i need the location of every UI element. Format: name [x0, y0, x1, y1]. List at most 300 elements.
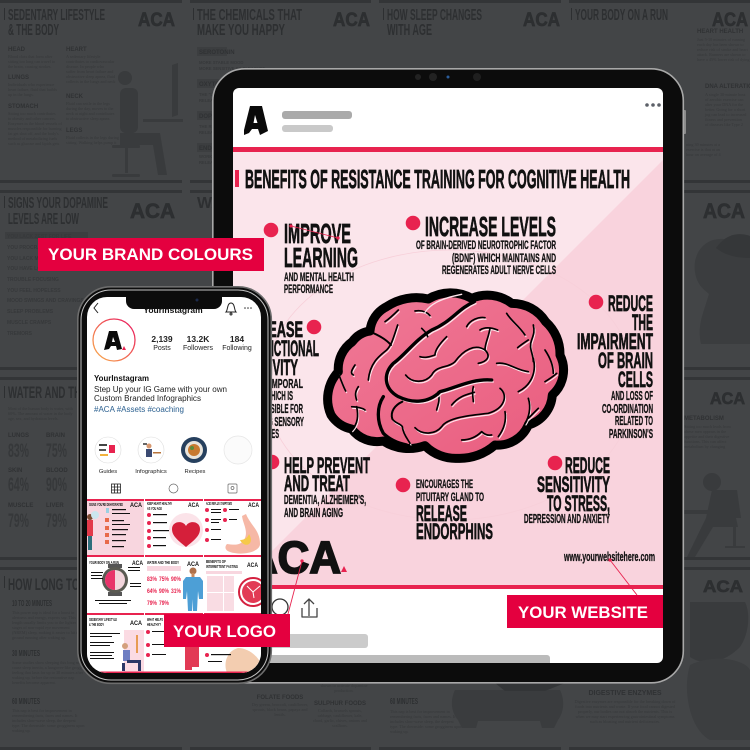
phone notch	[126, 296, 222, 309]
background tile: sedentary lifestyle: contributes to cardiovascular	[66, 59, 115, 64]
background tile: your body on a run: A single 30-minute bout	[705, 92, 746, 97]
background tile: sedentary lifestyle: A sedentary lifestyle	[66, 54, 101, 59]
phone mockup	[78, 287, 271, 683]
background tile: folate and sulphur foods	[252, 683, 368, 728]
benefit: release endorphins: RELEASE	[416, 501, 467, 526]
benefit: reduce sensitivity to stress: SENSITIVITY	[537, 472, 610, 497]
background tile: sedentary lifestyle: fat get shut off, and the body's	[8, 131, 59, 137]
background tile: digestive enzymes: when we may start experiencing gastrointestinal symptoms	[575, 714, 675, 719]
background tile: metabolism with person at desk: Sitting too much leads from	[684, 424, 731, 429]
background tile: sedentary lifestyle: Sitting too much contributes	[8, 111, 56, 116]
background tile: your body on a run: each day has been shown to	[697, 42, 744, 47]
background tile: water and the body: Most of the human body is water, with	[8, 406, 74, 412]
benefit: increase levels	[406, 216, 556, 274]
profile stats	[152, 336, 252, 352]
thumbnail: water and the body: 75%	[159, 577, 170, 583]
profile bio	[94, 374, 227, 414]
background tile: sedentary lifestyle	[4, 7, 175, 146]
post header username placeholders	[282, 111, 352, 132]
infographic post panel: TO STRESS,	[547, 491, 610, 516]
infographic post panel: AND LOSS OF	[611, 389, 653, 403]
thumbnail: heart health: KEEP HEART HEALTHY	[147, 501, 172, 506]
background tile: 60 minutes with couch: 60 MINUTES	[390, 697, 418, 706]
benefit: help prevent and treat: HELP PREVENT	[284, 453, 370, 478]
background tile: your body on a run	[571, 7, 750, 157]
background tile: folate and sulphur foods: lentils.	[274, 712, 286, 717]
background tile: the chemicals that make you happy: RELEASED BY EXERCISE	[199, 160, 251, 165]
infographic post panel: RELATED TO	[615, 414, 653, 428]
background tile: sedentary lifestyle: muscles responsible for burning	[8, 126, 63, 131]
post logo: ACA	[272, 540, 347, 574]
background illustration: liver and intestines: ACA	[703, 577, 743, 596]
background tile: water and the body: 79%	[8, 511, 29, 532]
background tile: how long to nap: 30 MINUTES	[12, 649, 40, 658]
notification bell icon	[226, 303, 236, 315]
background tile: how long to nap: alertness and energy, experts say. This	[12, 615, 76, 621]
background tile: sedentary lifestyle: Fluid collects in the legs during	[66, 135, 120, 140]
infographic post panel	[232, 147, 663, 589]
background illustration: woman hugging herself: ACA	[703, 200, 745, 223]
thumbnail: sedentary lifestyle: SEDENTARY LIFESTYLE	[89, 617, 117, 622]
background tile: metabolism with person at desk	[684, 389, 745, 557]
background tile: sedentary lifestyle: SEDENTARY LIFESTYLE	[8, 7, 105, 24]
thumbnail: sedentary lifestyle	[87, 613, 144, 673]
faint connecting circle	[272, 250, 552, 488]
background tile: how long to nap: remembering facts, faces and names. It	[12, 713, 78, 719]
callout connector: website	[609, 559, 637, 595]
benefit: release endorphins	[396, 477, 493, 544]
background tile: your body on a run: attack. Runners are shown to	[697, 52, 746, 57]
background tile: sedentary lifestyle: sitting. Walking helps pump it	[66, 140, 117, 145]
background tile: signs your dopamine levels are low: YOU PROCRASTINATE	[7, 245, 63, 251]
benefit: help prevent and treat: AND BRAIN AGING	[284, 506, 343, 520]
story highlight: infographics: Infographics	[135, 469, 167, 475]
callout connector: brand colours	[290, 225, 339, 239]
background tile: water and the body: LIVER	[46, 503, 64, 509]
background tile: metabolism with person at desk: obese men appears in the	[684, 429, 726, 434]
background tile: sedentary lifestyle: Fluid can settle in the legs	[66, 101, 110, 106]
benefit: improve learning: AND MENTAL HEALTH	[284, 270, 354, 284]
background tile: your body on a run: of diseases like Type 2	[705, 122, 743, 127]
background tile: sedentary lifestyle: collects in the lungs and neck	[66, 79, 116, 84]
benefit: reduce impairment	[577, 291, 653, 441]
tablet mockup	[213, 69, 686, 683]
background tile: sedentary lifestyle: the brain, causing strokes.	[8, 64, 52, 70]
background tile: the chemicals that make you happy: THE REWARD CHEMICAL	[199, 124, 251, 129]
background tile: sedentary lifestyle: during the day, moves to the	[66, 106, 114, 112]
background tile: how long to nap: This power nap is ideal for a boost in	[12, 610, 75, 615]
benefit: release endorphins: ENDORPHINS	[416, 519, 493, 544]
background tile: sedentary lifestyle: ACA	[138, 10, 175, 31]
background tile: signs your dopamine levels are low: MOOD SWINGS AND CRAVINGS	[7, 298, 84, 304]
benefit: reduce impairment: CO-ORDINATION	[602, 402, 653, 416]
thumbnail: heart health: ACA	[188, 502, 199, 509]
infographic post panel: CELLS	[618, 367, 653, 392]
background tile: 60 minutes with couch: type. The downside: some grogginess upon	[390, 724, 463, 729]
background tile: how long to nap: 60 MINUTES	[12, 697, 40, 706]
benefit: improve learning	[264, 218, 358, 296]
background tile: your body on a run: HEART HEALTH	[697, 29, 743, 35]
profile bio: #ACA #Assets #coaching	[94, 405, 184, 414]
back arrow	[94, 303, 98, 313]
label: your brand colours	[38, 238, 264, 271]
thumbnail: heart health: AS YOU AGE	[147, 506, 162, 511]
thumbnail: water and the body: 79%	[147, 601, 158, 607]
tablet screen	[232, 88, 663, 667]
profile bio: YourInstagram	[94, 374, 149, 383]
benefit: increase levels: (BDNF) WHICH MAINTAINS AND	[452, 251, 556, 265]
label: your website: YOUR WEBSITE	[518, 604, 648, 622]
clock tab icon	[169, 484, 178, 493]
background illustration: seated person at desk	[112, 63, 183, 177]
thumbnail: water and the body: 64%	[147, 589, 158, 595]
background tile: how long to nap: includes slow-wave sleep, the deepest	[12, 718, 76, 724]
thumbnail: hydration: SIGNS YOU'RE DEHYDRATED	[89, 502, 123, 507]
thumbnail: your body on a run: ACA	[132, 560, 143, 567]
background tile: the chemicals that make you happy: RELEASED BY GOALS	[199, 130, 245, 135]
background tile: how sleep changes with age: WITH AGE	[387, 22, 432, 39]
tablet side button	[683, 110, 686, 134]
benefit: help prevent and treat: AND TREAT	[284, 471, 350, 496]
benefit: increase levels: INCREASE LEVELS	[425, 211, 556, 242]
background tile: signs your dopamine levels are low: SLEEP PROBLEMS	[7, 309, 54, 315]
background tile: water and the body: SKIN	[8, 468, 22, 474]
background tile: your body on a run: better. Going for a short	[705, 107, 746, 112]
background tile: the chemicals that make you happy: ACA	[333, 10, 370, 31]
tablet body	[213, 69, 683, 683]
post header menu dots	[645, 103, 661, 107]
background tile: your body on a run: jog can lead to increased	[704, 112, 747, 117]
background tile: folate and sulphur foods: shown to activate dopamine	[321, 683, 368, 688]
profile stats: 2,139	[151, 334, 173, 344]
background tile: signs your dopamine levels are low: YOU HAVE LOW ENERGY	[7, 266, 69, 272]
brain illustration	[328, 293, 564, 458]
background tile: digestive enzymes: foods into nutrients and waste. If your food cannot digested	[575, 704, 676, 709]
background tile: water and the body: 75%	[46, 441, 67, 462]
background tile: folate and sulphur foods: cabbage, cauliflower, kale,	[318, 713, 362, 719]
background tile: how sleep changes with age: HOW SLEEP CHANGES	[387, 7, 482, 24]
thumbnail: acid reflux: ACID REFLUX SYMPTOMS	[206, 501, 232, 506]
background tile: sedentary lifestyle: LEGS	[66, 128, 82, 134]
profile bio: Custom Branded Infographics	[94, 394, 201, 403]
story highlight: guides: Guides	[99, 469, 117, 475]
background tile: water and the body: 90%	[46, 475, 67, 496]
benefit: help prevent and treat: DEMENTIA, ALZHEIMER'S,	[284, 493, 366, 507]
brain fold highlights	[339, 312, 558, 445]
background tile: sedentary lifestyle: obstructive sleep apnea, fluid	[66, 74, 116, 80]
background tile: how sleep changes with age: ACA	[523, 10, 560, 31]
background tile: signs your dopamine levels are low: TROUBLE FOCUSING	[7, 277, 59, 283]
comment icon	[272, 599, 288, 615]
phone screen	[87, 297, 267, 673]
profile username header: YourInstagram	[143, 305, 203, 315]
background illustration: liver and intestines	[687, 577, 750, 740]
thumbnail: water and the body: 90%	[159, 589, 170, 595]
thumbnail: water and the body: 90%	[171, 577, 182, 583]
story highlight: recipes	[181, 437, 207, 475]
thumbnail: water and the body: 31%	[171, 589, 182, 595]
background tile: digestive enzymes: Digestive enzymes are responsible for the breaking down of	[575, 699, 676, 704]
background tile: folate and sulphur foods: Dry greens, broccoli, cauliflower,	[252, 702, 308, 708]
background tile: how long to nap: 10 TO 20 MINUTES	[12, 599, 52, 608]
background tile: digestive enzymes	[575, 690, 676, 724]
background tile: your body on a run: ning 30 minutes at a	[686, 142, 720, 147]
thumbnail: sedentary lifestyle: ACA	[130, 620, 142, 627]
background tile: how long to nap: ground running after waking up.	[12, 635, 66, 640]
grid tab icon	[112, 484, 120, 493]
thumbnail: intermittent fasting: BENEFITS OF	[206, 559, 226, 564]
background tile: water and the body: 64%	[8, 475, 29, 496]
background tile: water and the body: 79%	[46, 511, 67, 532]
background tile: signs your dopamine levels are low: YOU FEEL HOPELESS	[7, 288, 61, 294]
benefit: reduce impairment: PARKINSON'S	[609, 427, 653, 441]
background tile: sedentary lifestyle: Blood clots that form after	[8, 54, 53, 59]
story highlight: recipes: Recipes	[185, 469, 206, 475]
benefit: increase functional activity: MODALITIES	[244, 427, 279, 441]
benefit: increase functional activity: ACTIVITY	[246, 355, 298, 380]
background tile: your body on a run: YOUR BODY ON A RUN	[575, 7, 668, 24]
background tile: your body on a run: exercise is that at an	[686, 147, 721, 152]
benefit: increase functional activity: RESPONSIBLE FOR	[245, 402, 303, 416]
infographic post panel: REDUCE	[608, 291, 653, 316]
post logo: ACA: ACA	[246, 532, 341, 583]
benefit: release endorphins: PITUITARY GLAND TO	[416, 490, 484, 504]
background tile: your body on a run: alter your DNA for the	[705, 102, 743, 107]
background tile: metabolism with person at desk: metabolism by changing	[684, 444, 726, 449]
background tile: how long to nap: waking up, before the restorative nap	[12, 675, 74, 681]
background tile: the chemicals that make you happy: THE CHEMICALS THAT	[197, 7, 302, 24]
background tile: how long to nap: benefits become apparent.	[12, 680, 56, 685]
background tile: how long to nap	[4, 575, 103, 733]
background tile: sedentary lifestyle: such as glucose and lipids gets	[8, 141, 60, 146]
background tile: the chemicals that make you happy: OXYTOCIN	[199, 82, 230, 88]
profile stats: Following	[222, 345, 252, 352]
background tile: how long to nap: This nap is best for improvement in	[12, 708, 73, 713]
background illustration: woman hugging herself	[695, 200, 750, 344]
background tile: metabolism with person at desk: ACA	[710, 389, 745, 408]
background tile: how long to nap: type. The downside: some grogginess upon	[12, 723, 85, 728]
background tile: sedentary lifestyle: NECK	[66, 94, 84, 100]
thumbnail: water and the body: ACA	[187, 561, 199, 568]
background tile: the chemicals that make you happy: WORKS AS A PAIN RELIEVER	[199, 154, 259, 159]
background tile: sedentary lifestyle: STOMACH	[8, 104, 38, 110]
benefit: increase levels: OF BRAIN-DERIVED NEUROTROPHIC FACTOR	[416, 238, 556, 252]
background tile: how long to nap: length usually limits you to the lighter	[12, 620, 77, 625]
thumbnail: sedentary lifestyle: & THE BODY	[89, 622, 104, 627]
background tile: digestive enzymes: DIGESTIVE ENZYMES	[588, 690, 662, 697]
background tile: sedentary lifestyle: HEART	[66, 47, 87, 53]
background tile: signs your dopamine levels are low	[4, 195, 254, 337]
infographic post panel: REDUCE	[565, 453, 610, 478]
background tile: sedentary lifestyle: Enzymes in the blood vessels of	[8, 121, 62, 126]
benefit: reduce impairment: IMPAIRMENT	[577, 329, 653, 354]
background tile: water and the body: LUNGS	[8, 433, 29, 439]
tagged tab icon	[228, 484, 237, 493]
thumbnail: what helps: HEALTHY?	[147, 622, 161, 627]
background tile: metabolism with person at desk: METABOLISM	[684, 416, 724, 422]
label: your logo	[164, 614, 290, 647]
background tile: the chemicals that make you happy: MORE SENSITIVE TO PLEASURE	[199, 66, 266, 71]
background tile: 60 minutes with couch: includes slow-wave sleep, the deepest	[390, 719, 454, 725]
background tile: your body on a run: have a 45% lower risk of dying	[697, 57, 750, 62]
profile stats: 13.2K	[187, 334, 210, 344]
background tile: water and the body: MUSCLE	[8, 503, 33, 509]
benefit: release endorphins: ENCOURAGES THE	[416, 477, 473, 491]
background tile: the chemicals that make you happy: MAKE YOU HAPPY	[197, 22, 285, 39]
background tile: signs your dopamine levels are low: TREMORS	[7, 331, 33, 337]
background tile: how long to nap: feeling that lasts for up to 30 minutes after	[12, 670, 84, 675]
brain lobe boundaries	[370, 294, 493, 445]
benefit: reduce sensitivity to stress	[524, 453, 610, 526]
benefit: increase functional activity: PROCESSING SENSORY	[232, 415, 304, 429]
background tile: the chemicals that make you happy	[193, 7, 370, 165]
background tile: folate and sulphur foods: Collards, brussels sprouts,	[318, 708, 362, 714]
background tile: 60 minutes with couch: waking up.	[390, 729, 409, 734]
post title	[235, 169, 630, 189]
background tile: sedentary lifestyle: method of metabolizing fuels	[8, 136, 58, 141]
background tile: how long to nap: (NREM) sleep, making it easier to hit the	[12, 630, 81, 636]
thumbnail: water and the body	[145, 555, 203, 614]
background tile: your body on a run: Just 5-10 minutes of running	[697, 37, 746, 42]
thumbnail: hydration: ACA	[130, 502, 142, 509]
background tile: sedentary lifestyle: LUNGS	[8, 75, 29, 81]
benefit: help prevent and treat	[272, 454, 370, 518]
background tile: signs your dopamine levels are low: MUSCLE CRAMPS	[7, 320, 52, 326]
background tile: how sleep changes with age	[383, 7, 560, 39]
story highlight: infographics	[135, 437, 167, 475]
thumbnail: what helps	[145, 613, 203, 673]
background tile: water and the body: 60%. The amount of water in the body	[8, 411, 73, 416]
background tile: sedentary lifestyle: up in the lungs.	[8, 92, 34, 97]
post header logo	[244, 106, 268, 135]
background tile: signs your dopamine levels are low: YOU LACK ZEST FOR LIFE	[7, 234, 72, 240]
phone body	[78, 287, 271, 683]
thumbnail: intermittent fasting: ACA	[247, 562, 258, 569]
background tile: water and the body: age, sex, and hydration levels.	[8, 416, 59, 422]
background tile: sedentary lifestyle: Individuals who experience	[8, 82, 54, 87]
background tile: signs your dopamine levels are low: YOU LACK MOTIVATION	[7, 256, 66, 262]
background tile: sedentary lifestyle: to obstructive sleep apnea.	[66, 116, 110, 121]
benefit: increase functional activity: LOBE WHICH IS	[247, 389, 293, 403]
website url: www.yourwebsitehere.com	[563, 549, 655, 564]
background tile: 60 minutes with couch: remembering facts, faces and names. It	[390, 714, 456, 720]
thumbnail: water and the body: WATER AND THE BODY	[147, 560, 179, 565]
label: your website	[507, 595, 663, 628]
background tile: how long to nap: waking up.	[12, 728, 31, 733]
background tile: sedentary lifestyle: neck at night and contributes	[66, 111, 115, 116]
profile stats: Posts	[153, 345, 171, 352]
background tile: folate and sulphur foods: chard, garlic, chives, onions and	[313, 718, 368, 724]
background tile: the chemicals that make you happy: MORE STABLE MOOD	[199, 60, 243, 65]
thumbnail: your body on a run	[87, 555, 144, 614]
thumbnail: your body on a run: YOUR BODY ON A RUN	[89, 560, 119, 565]
thumbnail: acid reflux	[204, 499, 261, 556]
background tile: digestive enzymes: properly, our bodies can not absorb the nutrients. This is	[578, 709, 672, 715]
background tile: water and the body: BRAIN	[46, 433, 65, 439]
background tile: signs your dopamine levels are low: ACA	[130, 200, 175, 223]
label: your brand colours: YOUR BRAND COLOURS	[48, 246, 253, 264]
background tile: how long to nap: Some studies show sleeping this long may	[12, 660, 84, 665]
background tile: sedentary lifestyle: & THE BODY	[8, 22, 59, 39]
background tile: 60 minutes with couch	[390, 683, 565, 734]
thumbnail: water and the body: 79%	[159, 601, 170, 607]
share icon	[302, 599, 317, 617]
benefit: increase functional activity: INCREASE	[237, 317, 303, 342]
profile bio: Step Up your IG Game with your own	[94, 385, 227, 394]
story highlight: guides	[95, 437, 121, 475]
empty story highlight	[224, 436, 252, 464]
background tile: water and the body: 83%	[8, 441, 29, 462]
benefit: increase functional activity	[272, 320, 322, 438]
thumbnail: hydration	[87, 499, 144, 556]
thumbnail: intermittent fasting	[204, 555, 267, 614]
brain fold lines	[338, 310, 557, 443]
background tile: the chemicals that make you happy: RELEASED BY TOUCH	[199, 98, 245, 103]
background tile: sedentary lifestyle: HEAD	[8, 47, 26, 53]
background tile: your body on a run: reduce risk of stroke and heart	[697, 47, 749, 52]
profile picture	[93, 319, 135, 361]
thumbnail: what helps: WHAT HELPS	[147, 617, 163, 622]
background tile: digestive enzymes: such as bloating and nutrient deficiencies.	[590, 719, 660, 724]
background tile: water and the body: WATER AND THE BODY	[8, 383, 118, 402]
background tile: how long to nap: cause sleep inertia, a hangover-like groggy	[12, 665, 85, 671]
callout connector: logo	[288, 560, 303, 614]
profile stats: 184	[230, 334, 244, 344]
background tile: folate and sulphur foods: SULPHUR FOODS	[314, 701, 366, 707]
background tile: how long to nap: HOW LONG TO NAP	[8, 575, 103, 594]
infographic post panel: THE	[632, 310, 653, 335]
background tile: folate and sulphur foods: FOLATE FOODS	[257, 695, 303, 701]
infographic post panel: FUNCTIONAL	[253, 336, 319, 361]
background tile: folate and sulphur foods: scallions.	[332, 723, 348, 728]
background tile: 60 minutes with couch: This nap is best for improvement in	[390, 709, 451, 714]
benefit: improve learning: IMPROVE	[284, 218, 351, 249]
background tile: metabolism with person at desk: appetite and their digestive	[684, 434, 729, 439]
background tile: your body on a run: of aerobic exercise can	[705, 97, 744, 102]
background tile: the chemicals that make you happy: ENDORPHINS	[199, 146, 239, 152]
background tile: sedentary lifestyle: suffer from heart failure and	[66, 69, 114, 74]
benefit: improve learning: LEARNING	[284, 242, 358, 273]
background tile: sedentary lifestyle: sitting too long can travel to	[8, 59, 55, 64]
profile stats: Followers	[183, 345, 213, 352]
background tile: signs your dopamine levels are low: SIGNS YOUR DOPAMINE	[8, 195, 108, 212]
background tile: signs your dopamine levels are low: LEVELS ARE LOW	[8, 211, 79, 228]
background tile: folate and sulphur foods: production.	[334, 688, 354, 693]
background tile: sedentary lifestyle: heart failure, fluid that builds	[8, 87, 57, 93]
tablet camera dots	[415, 73, 481, 81]
thumbnail: intermittent fasting: INTERMITTENT FASTING	[206, 564, 238, 569]
thumbnail: acid reflux: ACA	[248, 502, 259, 509]
label: your logo: YOUR LOGO	[173, 623, 276, 641]
thumbnail: heart health	[145, 499, 203, 556]
caption placeholder bars	[270, 634, 550, 663]
background tile: how long to nap: stages of non-rapid eye movement	[12, 625, 71, 630]
background tile: the chemicals that make you happy: DOPAMINE	[199, 114, 231, 120]
bottom screen accent	[87, 672, 261, 673]
benefit: reduce impairment: OF BRAIN	[598, 348, 653, 373]
benefit: improve learning: PERFORMANCE	[284, 282, 333, 296]
background tile: your body on a run: hour on average of 4	[686, 152, 722, 157]
background tile: water and the body: BLOOD	[46, 468, 68, 474]
background tile: signs your dopamine levels are low: WATER	[197, 195, 254, 212]
background tile: sedentary lifestyle: disease. In people who	[66, 64, 104, 69]
benefit: increase functional activity: IN THE TEMPORAL	[237, 377, 303, 391]
benefit: increase levels: REGENERATES ADULT NERVE CELLS	[442, 263, 556, 277]
background tile: water and the body	[4, 383, 118, 532]
background tile: folate and sulphur foods: sprouts, black beans, papaya and	[253, 707, 308, 713]
background tile: metabolism with person at desk: functions. This can affect	[684, 439, 727, 444]
background tile: sedentary lifestyle: to obesity and other cancers.	[8, 116, 56, 121]
